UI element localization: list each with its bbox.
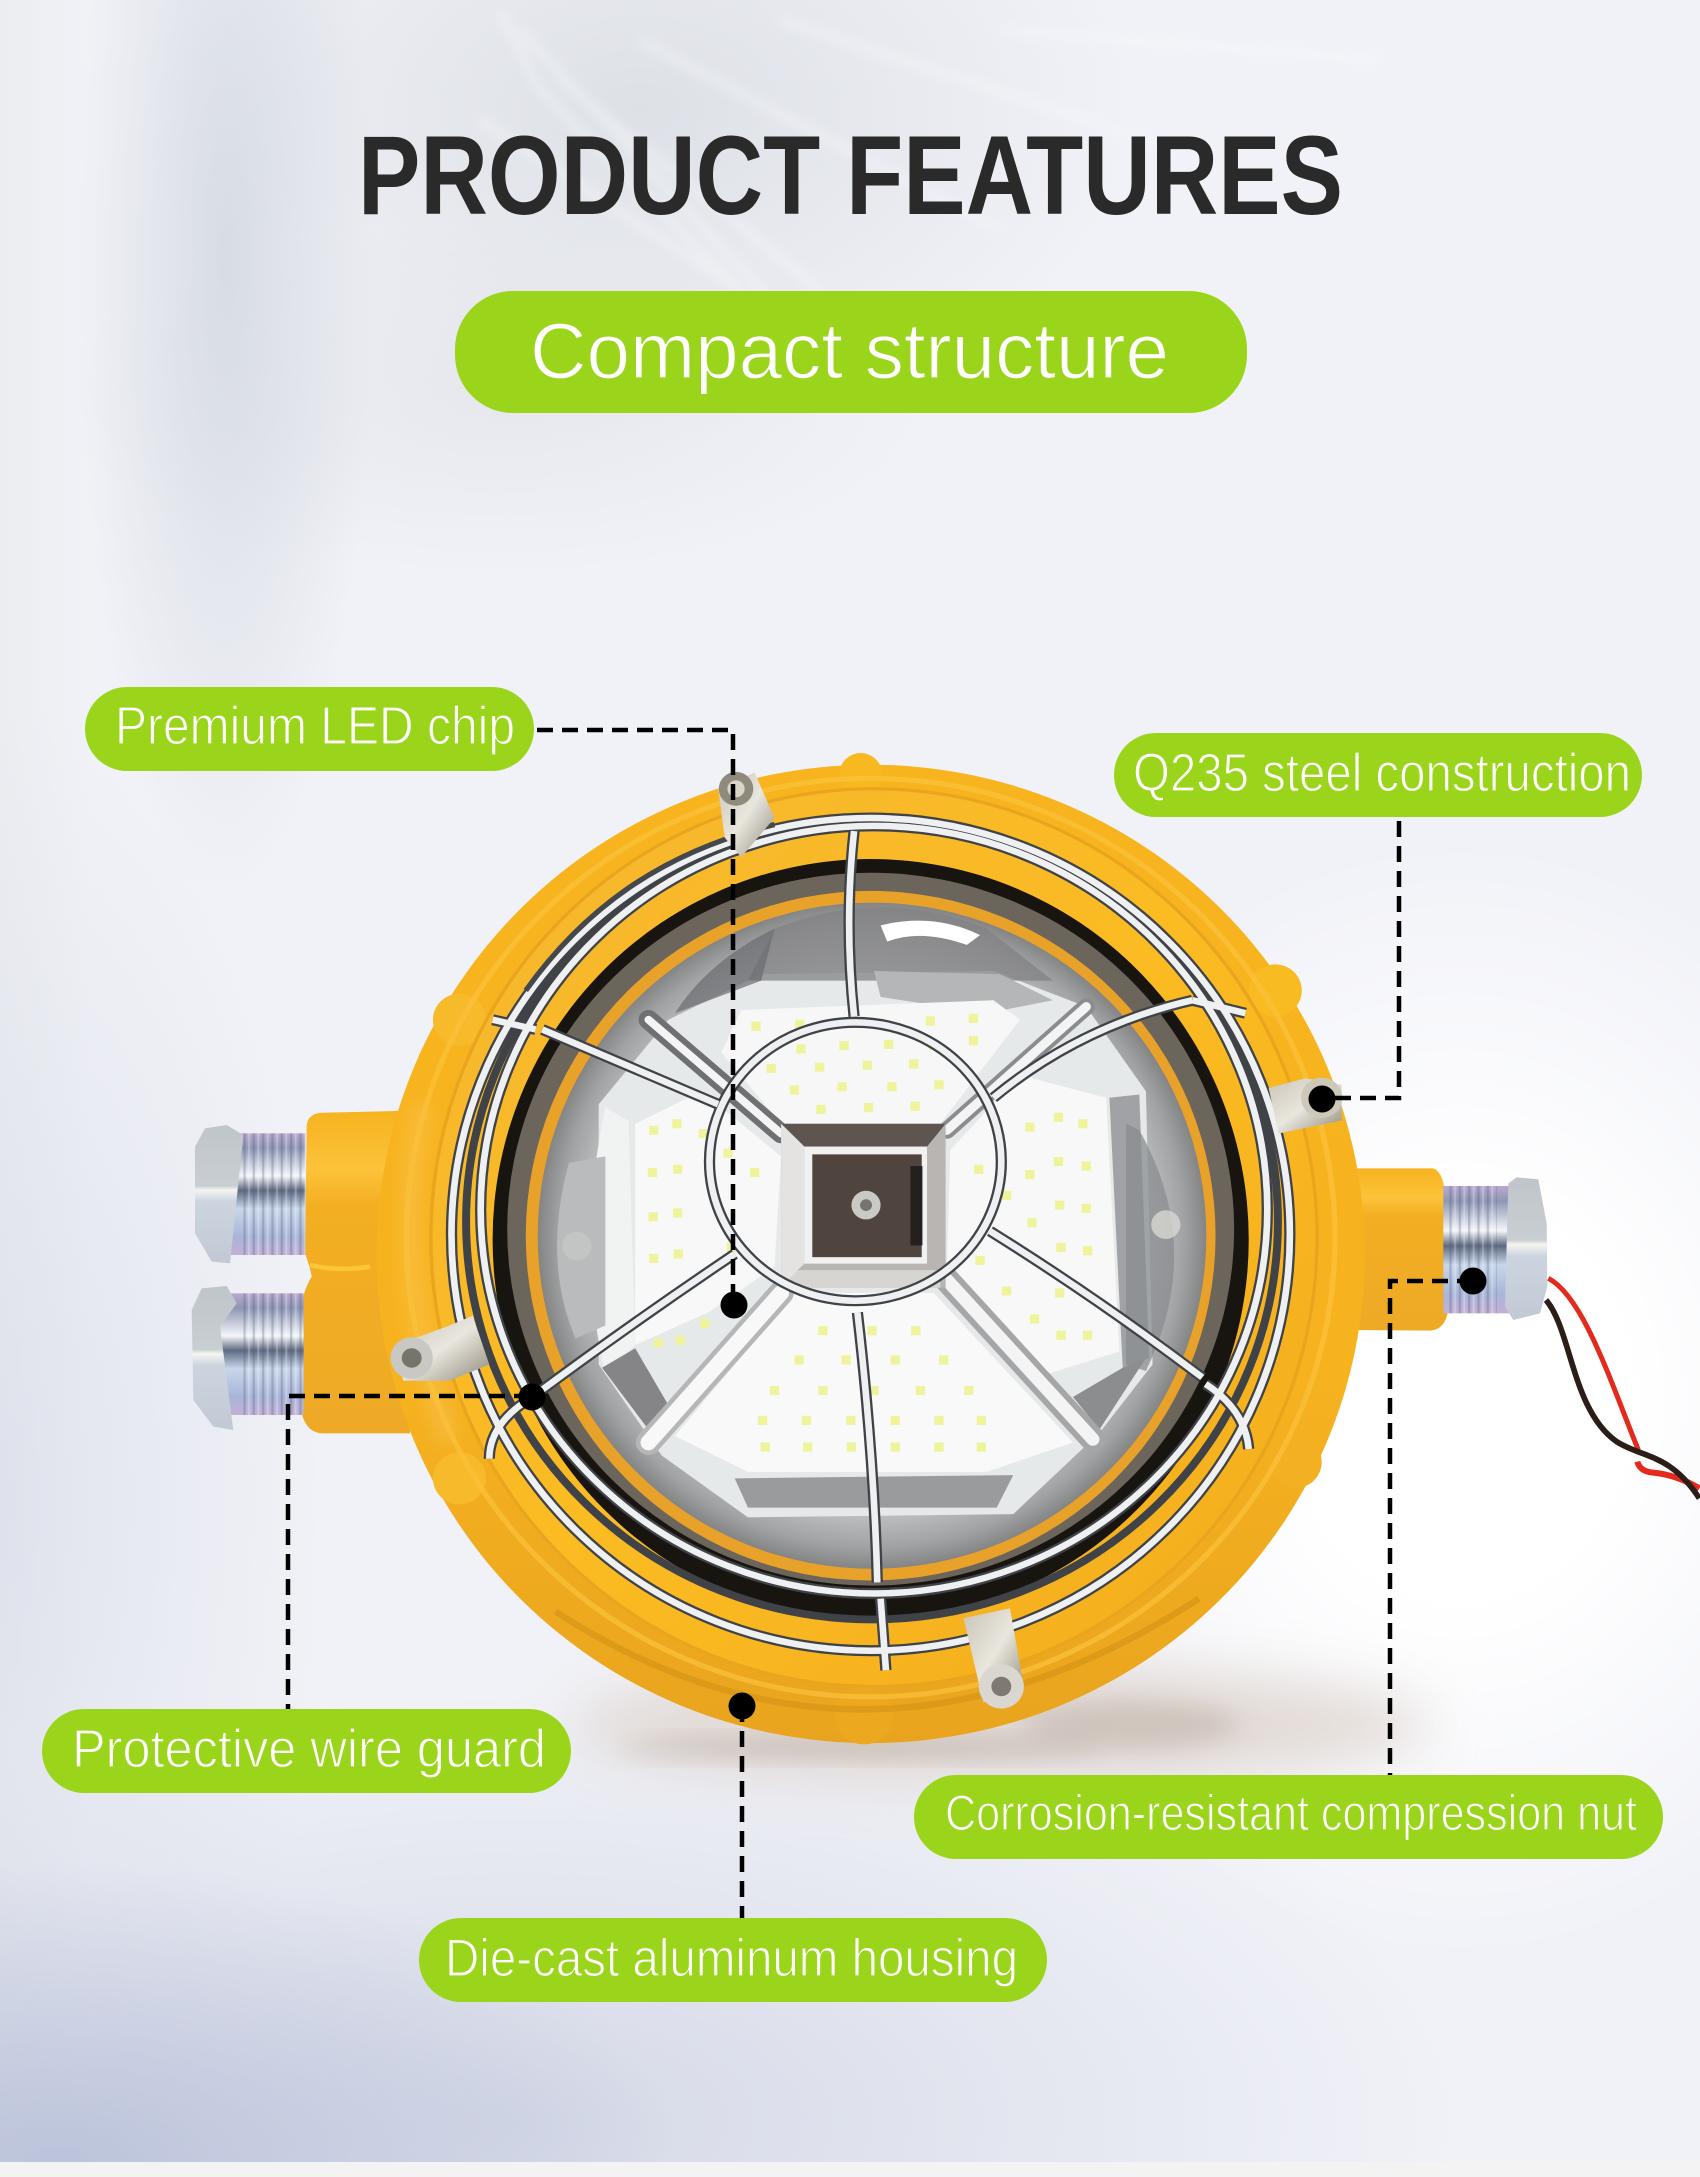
label: Q235 steel construction: Q235 steel construction bbox=[1133, 743, 1631, 803]
LED chips bbox=[648, 1014, 1092, 1452]
ground shadow under lamp bbox=[570, 1667, 1430, 1783]
label: Q235 steel construction bbox=[1114, 733, 1642, 817]
mounting clips and screws bbox=[390, 772, 1342, 1709]
product photo: explosion-proof LED lamp bbox=[192, 753, 1699, 1744]
right cable port and wires bbox=[1350, 1168, 1699, 1498]
housing with lugs bbox=[377, 753, 1365, 1744]
light streaks in the backdrop bbox=[480, 10, 1380, 310]
lamp head in close-up coordinates bbox=[377, 753, 1365, 1744]
label: Protective wire guard: Protective wire guard bbox=[72, 1719, 546, 1779]
subtitle pill: Compact structure bbox=[455, 291, 1247, 413]
left cable ports bbox=[192, 1111, 410, 1433]
reflector ribs bbox=[648, 1007, 1093, 1443]
center driver plate bbox=[781, 1124, 946, 1288]
LED boards bbox=[721, 1000, 1020, 1124]
wire guard bbox=[451, 818, 1290, 1670]
lens screws bbox=[562, 1232, 591, 1260]
label: Premium LED chip: Premium LED chip bbox=[115, 696, 515, 756]
title: PRODUCT FEATURES bbox=[358, 113, 1343, 238]
subtitle pill: Compact structure: Compact structure bbox=[530, 306, 1169, 395]
label: Protective wire guard bbox=[42, 1709, 571, 1793]
rubber gasket bbox=[493, 859, 1249, 1620]
callout leaders: dashed lines and black dots bbox=[288, 730, 1486, 1918]
label: Premium LED chip bbox=[85, 687, 534, 771]
glass lens and reflector bbox=[538, 903, 1206, 1569]
label: Die-cast aluminum housing: Die-cast aluminum housing bbox=[445, 1929, 1018, 1988]
label: Die-cast aluminum housing bbox=[419, 1918, 1047, 2002]
label: Corrosion-resistant compression nut bbox=[914, 1775, 1663, 1859]
